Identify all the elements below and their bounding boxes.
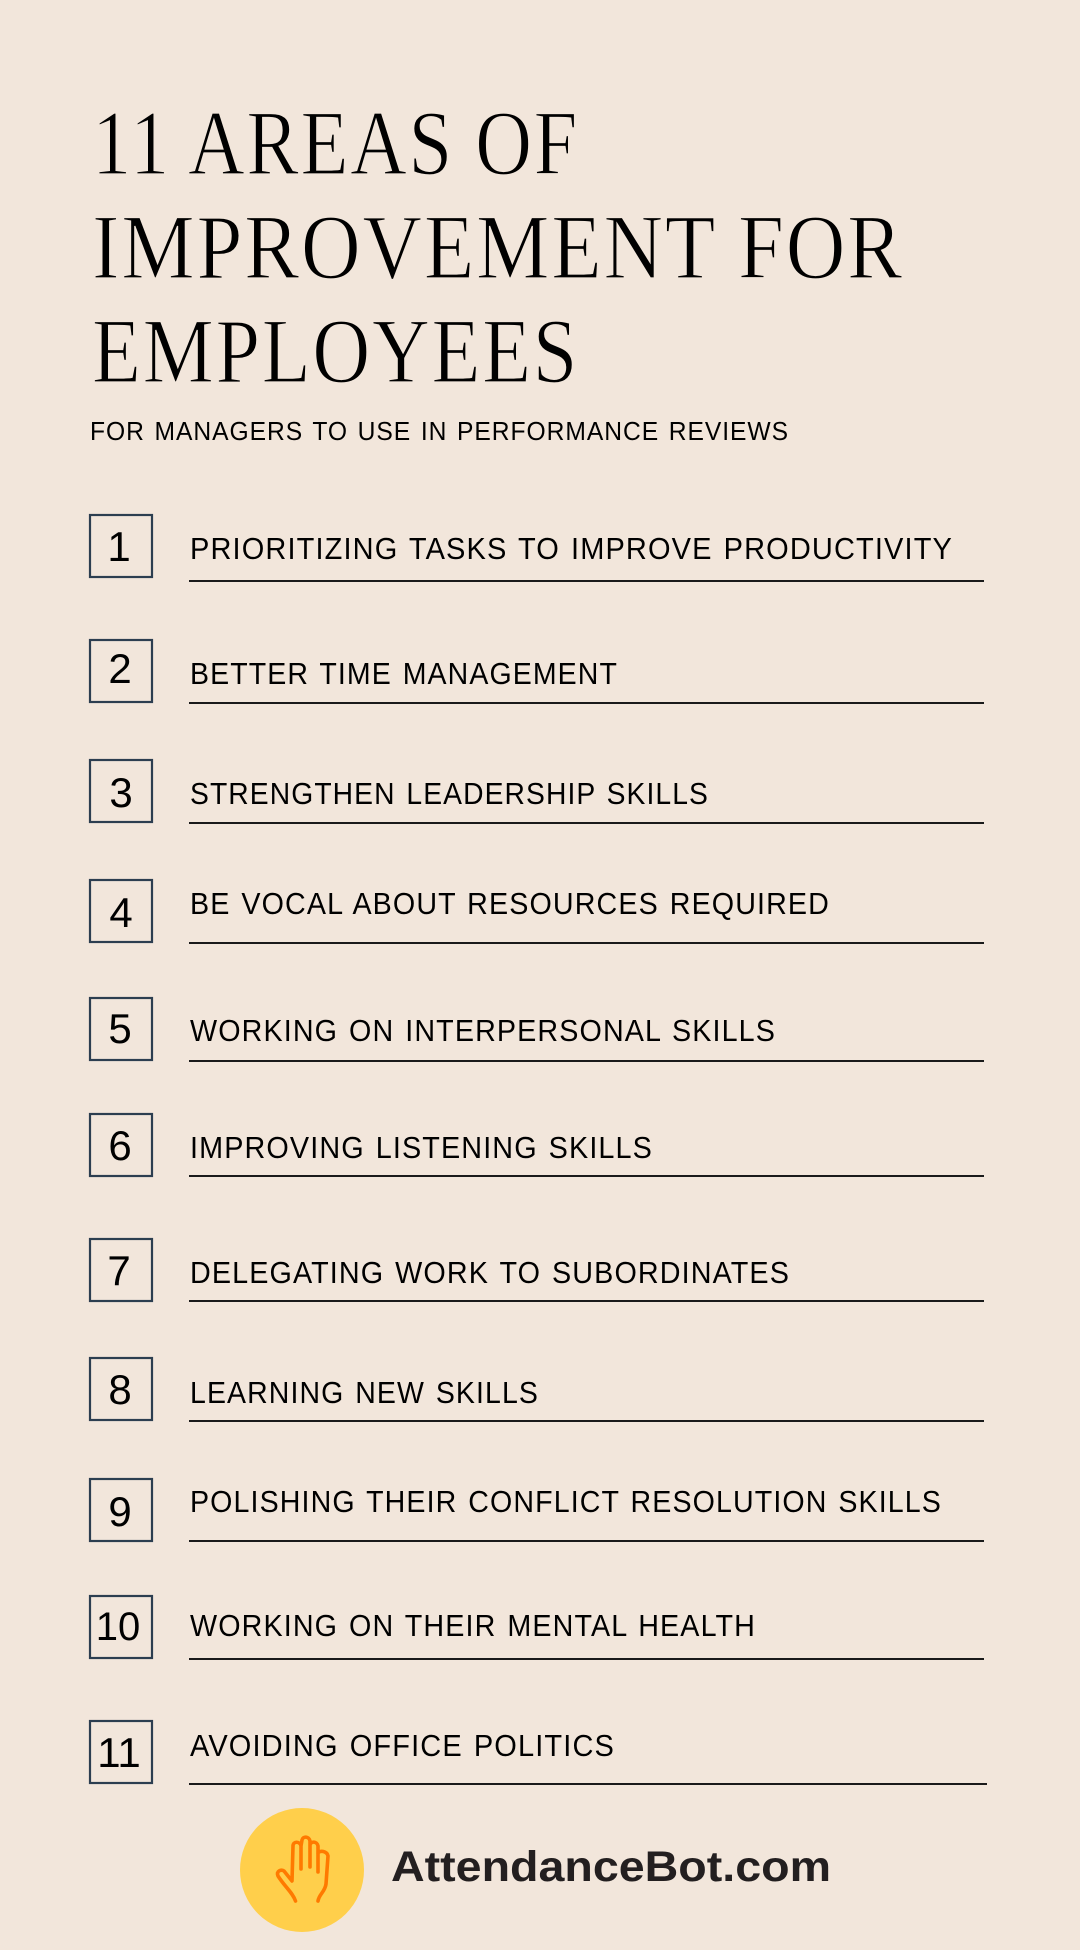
item 8: LEARNING NEW SKILLS (190, 1375, 539, 1410)
item 7 (90, 1239, 984, 1301)
item 3 (90, 760, 984, 823)
item 7: DELEGATING WORK TO SUBORDINATES (190, 1255, 790, 1290)
title (92, 92, 904, 402)
item 2 (90, 640, 984, 703)
item 5 (90, 998, 984, 1061)
title: 11 AREAS OF (92, 92, 579, 194)
item 9 (90, 1479, 984, 1541)
item 2: 2 (108, 645, 132, 692)
item 1: 1 (107, 523, 131, 570)
item 11: AVOIDING OFFICE POLITICS (190, 1728, 615, 1763)
item 9: POLISHING THEIR CONFLICT RESOLUTION SKILLS (190, 1484, 942, 1519)
item 4: 4 (109, 889, 133, 936)
item 1 (90, 515, 984, 581)
item 10: WORKING ON THEIR MENTAL HEALTH (190, 1608, 756, 1643)
item 3: 3 (109, 769, 133, 816)
item 6: 6 (108, 1122, 132, 1169)
item 7: 7 (107, 1247, 131, 1294)
item 11: 11 (97, 1729, 141, 1776)
item 4 (90, 880, 984, 943)
item 4: BE VOCAL ABOUT RESOURCES REQUIRED (190, 886, 830, 921)
item 9: 9 (108, 1488, 132, 1535)
title: IMPROVEMENT FOR (92, 196, 904, 298)
item 3: STRENGTHEN LEADERSHIP SKILLS (190, 776, 709, 811)
title: EMPLOYEES (92, 300, 579, 402)
brand name: AttendanceBot.com (391, 1843, 831, 1891)
item 11 (90, 1721, 987, 1784)
icon: hand in yellow circle (240, 1808, 364, 1932)
item 5: 5 (108, 1005, 132, 1052)
item 10 (90, 1596, 984, 1659)
item 6: IMPROVING LISTENING SKILLS (190, 1130, 653, 1165)
item 8: 8 (108, 1366, 132, 1413)
item 1: PRIORITIZING TASKS TO IMPROVE PRODUCTIVITY (190, 531, 953, 566)
item 2: BETTER TIME MANAGEMENT (190, 656, 618, 691)
item 5: WORKING ON INTERPERSONAL SKILLS (190, 1013, 776, 1048)
item 8 (90, 1358, 984, 1421)
item 10: 10 (96, 1605, 140, 1649)
item 6 (90, 1114, 984, 1176)
subtitle: FOR MANAGERS TO USE IN PERFORMANCE REVIEWS (90, 416, 789, 446)
footer logo (240, 1808, 831, 1932)
